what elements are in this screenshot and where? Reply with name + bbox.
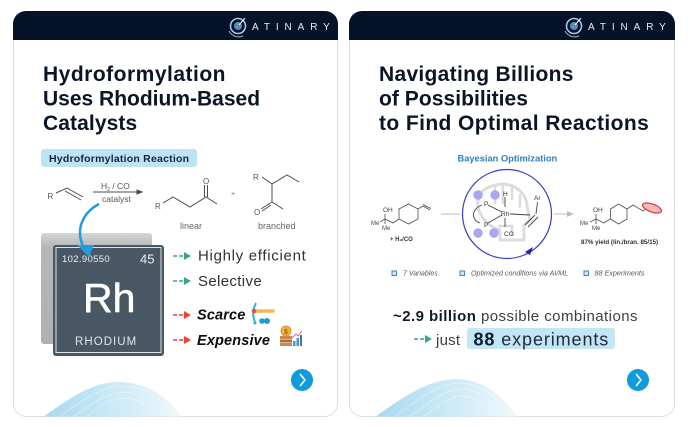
decorative wave left: [43, 382, 182, 417]
legend: 88 experiments: 88 Experiments: [594, 268, 645, 278]
list: highly efficient: Highly efficient: [198, 248, 307, 264]
legend: 7 variables: 7 Variables: [403, 270, 438, 278]
catalyst cycle circle: Ar: [534, 195, 541, 202]
rhodium element tile: Rh: [83, 275, 135, 321]
logo right: [565, 18, 672, 37]
header bar left: [13, 11, 338, 40]
reaction arrow: / CO: [110, 181, 130, 191]
reactant molecule: OH: [383, 207, 393, 214]
decorative wave right: [375, 379, 518, 417]
product molecule: [580, 201, 663, 246]
legend: optimized conditions: Optimized conditions via AI/ML: [471, 270, 568, 278]
next button left: [291, 369, 313, 391]
product molecule: OH: [593, 207, 603, 214]
reactant molecule: [371, 204, 431, 243]
list: scarce: [173, 308, 245, 324]
reactant molecule: + H₂/CO: [390, 237, 413, 243]
header bar right: [349, 11, 675, 40]
title right: Navigating Billions: [379, 63, 574, 86]
statement: possible combinations: ~2.9 billion possible combinations: [393, 308, 638, 325]
badge: hydroformylation reaction: Hydroformylation Reaction: [49, 153, 189, 165]
highlight: 88 experiments: 88 experiments: [474, 330, 609, 350]
catalyst cycle circle: Rh: [501, 211, 510, 218]
reaction arrow: catalyst: [102, 194, 131, 204]
icon: pickaxe and ore: [252, 303, 273, 324]
title left: Hydroformylation: [43, 63, 226, 86]
logo left: ATINARY: [252, 22, 336, 33]
reactant: [48, 188, 83, 201]
reaction scheme: [48, 173, 299, 231]
rhodium complex bonds: [473, 197, 538, 227]
reactant molecule: Me: [382, 226, 391, 232]
linear product: O: [203, 177, 209, 186]
connector line: [441, 213, 460, 215]
logo left: [229, 18, 336, 37]
catalyst cycle circle: P: [484, 222, 488, 229]
plus: +: [231, 191, 235, 198]
logo right: ATINARY: [588, 22, 672, 33]
reactant molecule: Me: [371, 221, 380, 227]
list: scarce: Scarce: [197, 308, 245, 324]
catalyst cycle circle: P: [484, 201, 488, 208]
rhodium element tile: RHODIUM: [75, 336, 137, 348]
product molecule: 87% yield (lin./bran. 85/15): [581, 239, 658, 246]
branched product: R: [253, 173, 259, 182]
rhodium element tile: 102.90550: [62, 254, 110, 265]
list: expensive: Expensive: [197, 333, 270, 349]
catalyst cycle circle: [462, 170, 552, 258]
title left: Uses Rhodium-Based: [43, 88, 260, 110]
branched product: [253, 173, 299, 231]
list: selective: Selective: [198, 273, 262, 290]
branched product: O: [254, 208, 260, 217]
catalyst cycle circle: H: [503, 191, 508, 198]
reaction arrow: H: [101, 181, 107, 191]
heading: bayesian optimization: Bayesian Optimization: [458, 154, 558, 164]
rhodium element tile: [41, 233, 164, 356]
linear product: R: [155, 202, 161, 211]
product molecule: Me: [592, 226, 601, 232]
linear product: [155, 177, 217, 231]
linear product: linear: [180, 221, 202, 231]
title right: to Find Optimal Reactions: [379, 112, 649, 135]
branched product: branched: [258, 221, 296, 231]
reaction arrow: [93, 181, 142, 204]
badge: hydroformylation reaction: [41, 149, 197, 167]
title left: Catalysts: [43, 112, 137, 135]
connector arrow: [554, 211, 574, 217]
text: just: just: [435, 332, 461, 349]
icon: coins and growth chart: [280, 326, 302, 346]
arrow: green: [414, 335, 432, 343]
reaction arrow: 2: [107, 187, 110, 193]
icon: coins and growth chart: $: [284, 329, 288, 336]
title right: of Possibilities: [379, 88, 528, 110]
next button right: [627, 369, 649, 391]
phosphine ligand spheres: [473, 190, 483, 200]
product molecule: Me: [580, 221, 589, 227]
reactant: R: [48, 192, 54, 201]
panel: bayesian optimization card: [349, 11, 675, 417]
catalyst cycle circle: CO: [504, 231, 514, 238]
rhodium element tile: 45: [140, 252, 154, 266]
panel: hydroformylation card: [13, 11, 338, 417]
blue curved arrow: [77, 204, 99, 257]
brain outline: [478, 184, 530, 240]
